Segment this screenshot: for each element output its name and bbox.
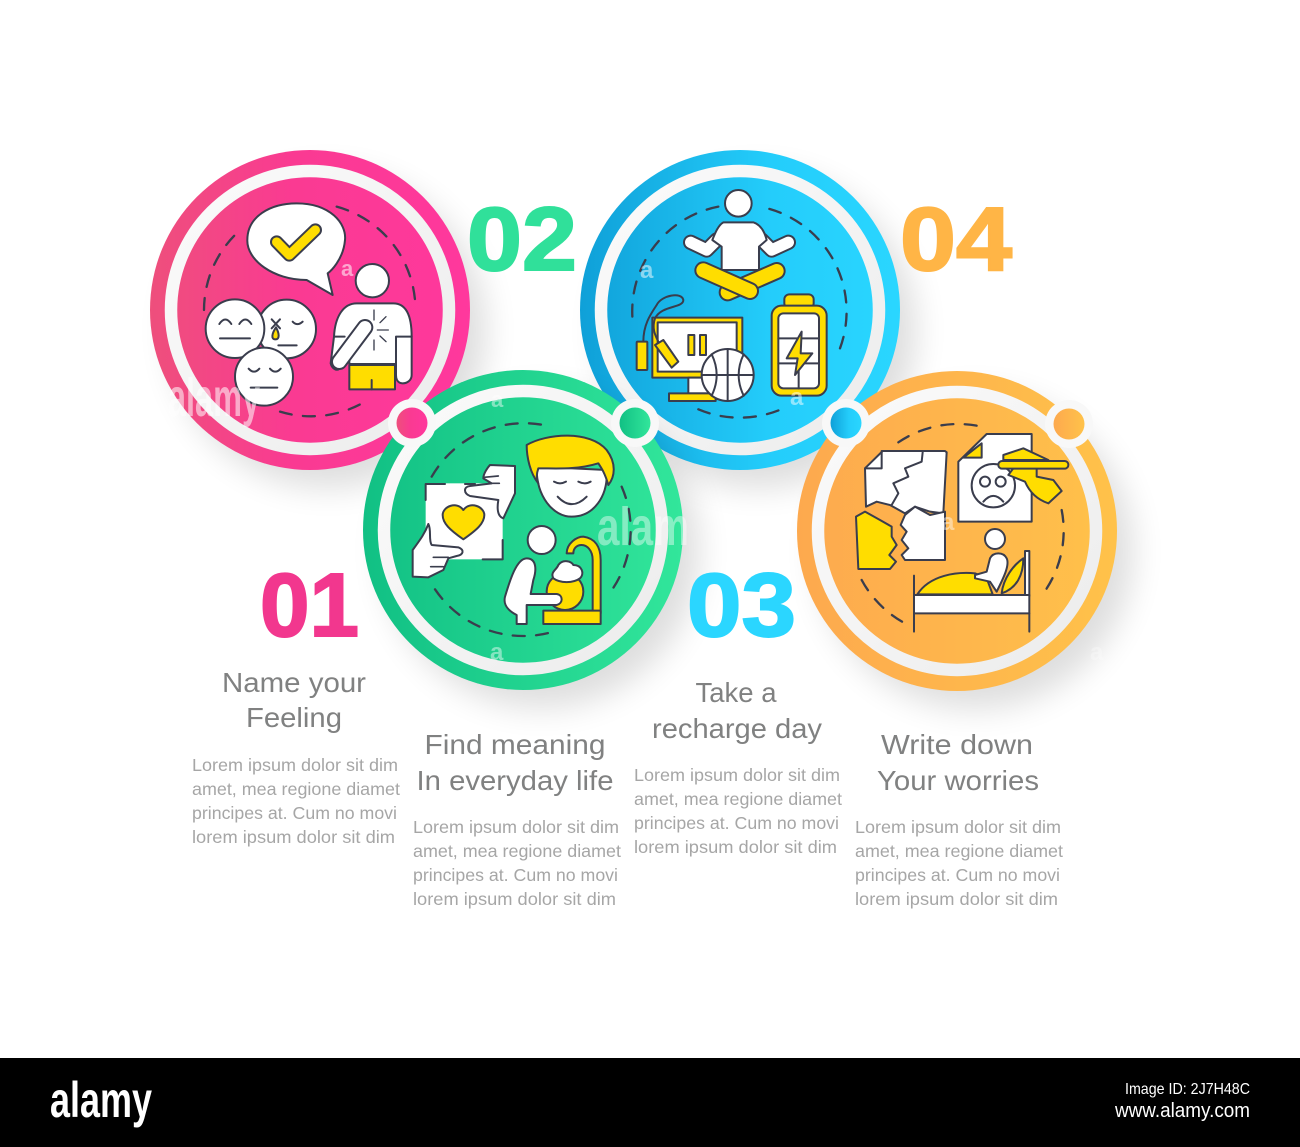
body: step 4: Lorem ipsum dolor sit dim [855,817,1061,837]
body: step 1: amet, mea regione diamet [192,779,400,799]
watermark: alamy [168,368,260,428]
heading: step 3: Take a [696,677,777,708]
panel: step 3 circle: a [790,384,804,411]
panel: step 4 circle [797,371,1133,709]
step 4 text [855,729,1063,909]
panel: step 2 circle [363,370,699,708]
body: step 1: lorem ipsum dolor sit dim [192,827,395,847]
panel: step 1 circle: a [341,256,354,281]
body: step 3: Lorem ipsum dolor sit dim [634,765,840,785]
icon: meaning in everyday life [413,423,631,636]
icon: writing down worries [856,424,1068,632]
body: step 3 [634,765,842,857]
icon: recharge day [632,190,847,418]
step 1 text [192,667,400,847]
connector node: pink [388,399,436,447]
body: step 1 [192,755,400,847]
heading: step 2: Find meaning [424,729,606,760]
body: step 2: principes at. Cum no movi [413,865,618,885]
panel: step 4 circle: a [1090,639,1104,666]
watermark: a [640,257,654,284]
connector node: orange [1045,400,1093,448]
body: step 2: lorem ipsum dolor sit dim [413,889,616,909]
body: step 1: principes at. Cum no movi [192,803,397,823]
footer url: www.alamy.com [1114,1100,1250,1122]
number 04: 04 [900,190,1012,290]
footer image id: Image ID: 2J7H48C [1125,1081,1250,1098]
step 2 text [413,729,621,909]
panel: step 1 circle [150,150,486,488]
body: step 1: Lorem ipsum dolor sit dim [192,755,398,775]
heading: step 3: recharge day [652,713,822,744]
number 01: 01 [260,556,359,656]
heading: step 3 [652,677,822,744]
panel: step 3 circle [580,150,916,488]
body: step 4: principes at. Cum no movi [855,865,1060,885]
heading: step 2: In everyday life [416,765,614,796]
heading: step 1: Feeling [246,702,342,733]
watermark: a [941,509,955,536]
body: step 3: principes at. Cum no movi [634,813,839,833]
heading: step 2 [416,729,614,796]
number 03: 03 [687,556,796,656]
footer logo: alamy [50,1072,152,1128]
footer bar [0,1058,1300,1147]
heading: step 1 [222,667,366,733]
icon: naming feelings [204,203,415,416]
number 02: 02 [467,190,577,290]
heading: step 4: Write down [881,729,1033,760]
body: step 4 [855,817,1063,909]
heading: step 4: Your worries [877,765,1039,796]
heading: step 1: Name your [222,667,366,698]
body: step 2: Lorem ipsum dolor sit dim [413,817,619,837]
panel: step 2 circle: a [491,387,504,412]
body: step 2 [413,817,621,909]
connector node: blue [822,399,870,447]
heading: step 4 [877,729,1039,796]
watermark: alam [597,497,689,557]
body: step 3: amet, mea regione diamet [634,789,842,809]
body: step 4: amet, mea regione diamet [855,841,1063,861]
body: step 2: amet, mea regione diamet [413,841,621,861]
step 3 text [634,677,842,857]
panel: step 2 circle: a [490,639,504,666]
connector node: green [611,399,659,447]
body: step 3: lorem ipsum dolor sit dim [634,837,837,857]
body: step 4: lorem ipsum dolor sit dim [855,889,1058,909]
